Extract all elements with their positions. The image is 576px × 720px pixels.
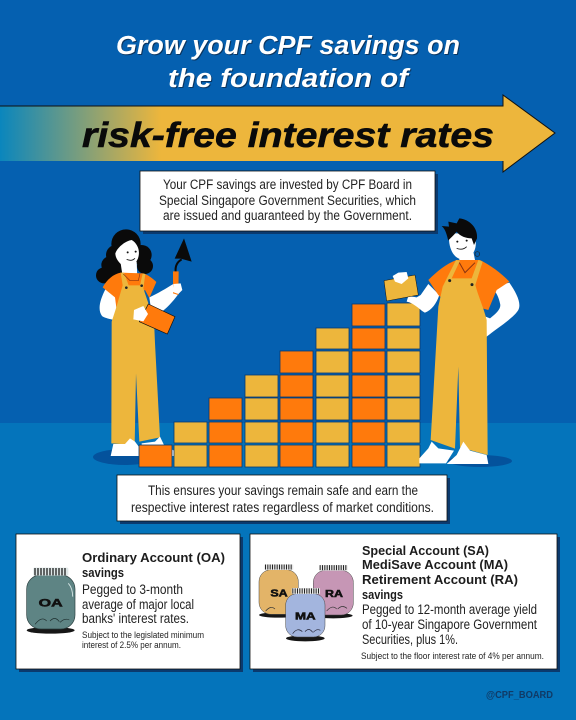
OA description: Subject to the legislated minimum (82, 630, 204, 641)
jar MA: MA (295, 612, 316, 623)
OA description: interest of 2.5% per annum. (82, 640, 181, 651)
jar SA: SA (270, 588, 288, 599)
figure: woman with trowel (96, 229, 192, 456)
OA description: Ordinary Account (OA) (82, 550, 225, 565)
SA MA RA description: Securities, plus 1%. (362, 632, 458, 647)
OA description: savings (82, 565, 124, 580)
text box: safe savings: respective interest rates regardless of market conditions. (131, 500, 434, 515)
title: Grow your CPF savings on (116, 32, 460, 60)
brick in hand (139, 304, 175, 334)
bricks staircase (139, 303, 420, 467)
jar RA: RA (325, 589, 343, 600)
trowel (173, 238, 192, 295)
text box: safe savings: This ensures your savings remain safe and earn the (148, 483, 418, 498)
panel: Ordinary Account (16, 534, 243, 672)
OA description: average of major local (82, 597, 194, 612)
text box: invested: are issued and guaranteed by the Government. (163, 208, 412, 223)
text box: safe savings (117, 475, 450, 524)
OA description: Pegged to 3-month (82, 582, 183, 597)
SA MA RA description: of 10-year Singapore Government (362, 617, 537, 632)
text box: invested: Your CPF savings are invested by CPF Board in (163, 177, 412, 192)
banner heading: risk-free interest rates (82, 116, 494, 155)
icon: OA jar: OA (39, 598, 63, 610)
SA MA RA description: MediSave Account (MA) (362, 557, 508, 572)
icon: SA MA RA jars (259, 564, 353, 641)
SA MA RA description: Special Account (SA) (362, 543, 489, 558)
handle: @CPF_BOARD (486, 689, 553, 701)
title (116, 32, 460, 93)
OA description: banks' interest rates. (82, 611, 189, 626)
arrow banner (0, 95, 555, 172)
hair (96, 229, 153, 283)
figure: man holding brick (384, 218, 519, 464)
shoes (419, 442, 488, 464)
brick held (384, 275, 418, 301)
SA MA RA description: savings (362, 587, 403, 602)
title: the foundation of (168, 65, 411, 93)
shoes (111, 437, 174, 456)
SA MA RA description: Pegged to 12-month average yield (362, 602, 537, 617)
text box: invested: Special Singapore Government Securities, which (159, 193, 416, 208)
icon: OA jar (27, 568, 75, 634)
SA MA RA description: Subject to the floor interest rate of 4% per annum. (361, 651, 544, 662)
shadow under figures (93, 449, 512, 467)
SA MA RA description: Retirement Account (RA) (362, 572, 518, 587)
panel: SA MA RA (250, 534, 560, 672)
OA description (82, 550, 225, 651)
SA MA RA description (361, 543, 544, 662)
text box: invested (140, 171, 438, 234)
